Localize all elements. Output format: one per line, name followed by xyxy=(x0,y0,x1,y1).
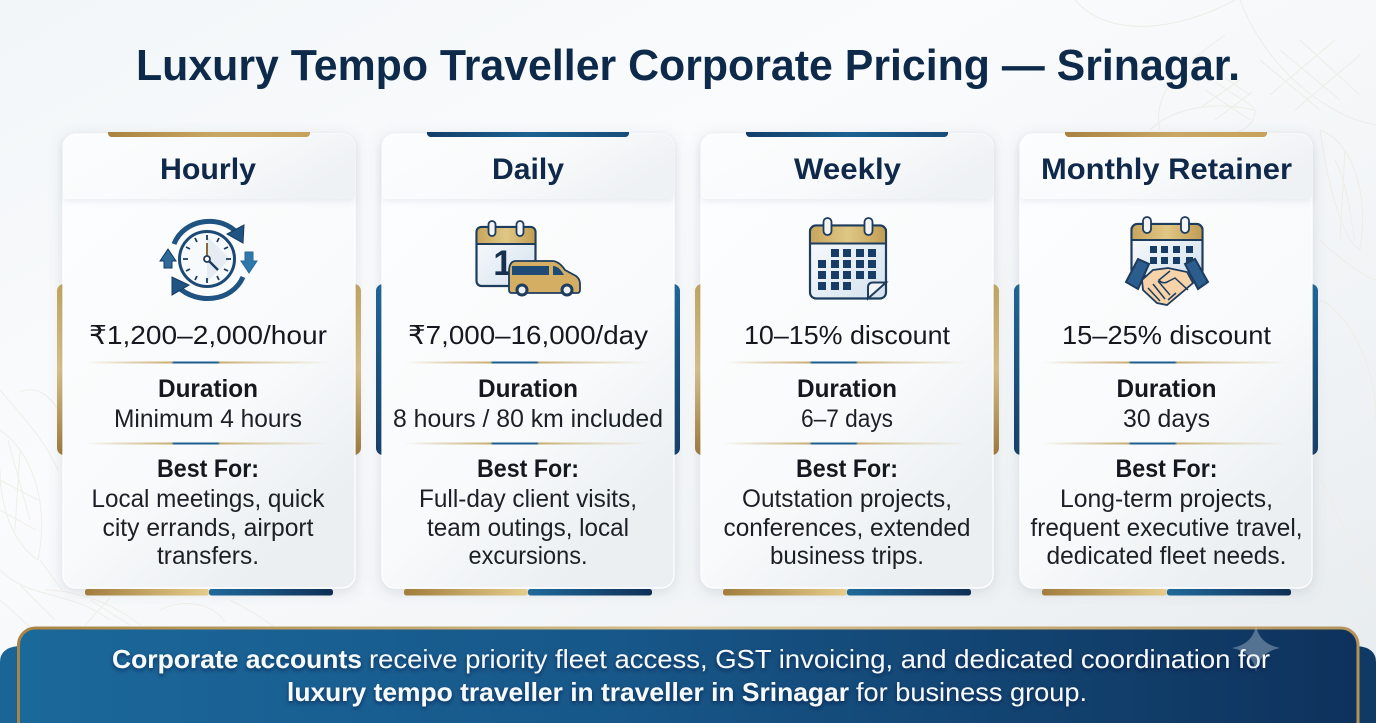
card frame: monthly xyxy=(1014,132,1318,596)
best for: weekly xyxy=(724,455,970,570)
banner text xyxy=(112,644,1270,707)
duration: monthly xyxy=(1116,375,1216,433)
icon: calendar with van xyxy=(476,221,580,295)
duration: daily: Duration xyxy=(478,375,578,403)
duration: daily xyxy=(393,375,663,433)
best for: hourly: transfers. xyxy=(157,542,259,570)
duration: daily: 8 hours / 80 km included xyxy=(393,405,663,433)
best for: weekly: conferences, extended xyxy=(724,514,970,542)
best for: daily xyxy=(419,455,637,570)
best for: monthly: Long-term projects, xyxy=(1060,485,1273,513)
banner text: for business group. xyxy=(856,677,1087,707)
heading: Daily: Daily xyxy=(492,153,564,186)
icon: clock with circular arrows xyxy=(160,221,257,298)
heading: Hourly: Hourly xyxy=(160,153,256,186)
best for: hourly: Local meetings, quick xyxy=(92,485,325,513)
bottom banner xyxy=(0,625,1376,723)
heading: Monthly Retainer: Monthly Retainer xyxy=(1041,153,1292,186)
icon: calendar with handshake xyxy=(1126,217,1208,305)
best for: monthly: dedicated fleet needs. xyxy=(1046,542,1286,570)
banner text: Corporate accounts xyxy=(112,644,362,674)
best for: daily: team outings, local xyxy=(427,514,629,542)
duration: monthly: 30 days xyxy=(1123,405,1210,433)
best for: hourly: city errands, airport xyxy=(102,514,314,542)
best for: daily: Full-day client visits, xyxy=(419,485,637,513)
best for: daily: Best For: xyxy=(477,455,579,483)
best for: hourly: Best For: xyxy=(157,455,259,483)
best for: weekly: business trips. xyxy=(770,542,924,570)
panel: Weekly xyxy=(695,132,999,596)
banner text: luxury tempo traveller in traveller in Srinagar xyxy=(287,677,849,707)
icon: sparkle star xyxy=(1232,625,1280,672)
duration: weekly: Duration xyxy=(797,375,897,403)
card frame: hourly xyxy=(57,132,361,596)
panel: Daily xyxy=(376,132,680,596)
heading: Weekly: Weekly xyxy=(794,153,901,186)
card frame: daily xyxy=(376,132,680,596)
decorative mandala pattern: bottom left xyxy=(0,390,275,627)
icon: weekly calendar xyxy=(810,218,886,298)
duration: monthly: Duration xyxy=(1116,375,1216,403)
banner back tabs xyxy=(0,646,1376,723)
icon: calendar with van: 1 xyxy=(493,244,513,283)
title: Luxury Tempo Traveller Corporate Pricing — Srinagar. xyxy=(136,41,1240,90)
duration: hourly xyxy=(114,375,302,433)
price: hourly: ₹1,200–2,000/hour xyxy=(89,320,327,350)
duration: hourly: Minimum 4 hours xyxy=(114,405,302,433)
price: monthly: 15–25% discount xyxy=(1062,320,1272,350)
duration: hourly: Duration xyxy=(158,375,258,403)
price: weekly: 10–15% discount xyxy=(744,320,951,350)
decorative mandala pattern: top right xyxy=(1075,0,1376,590)
panel: Hourly xyxy=(57,132,361,596)
best for: daily: excursions. xyxy=(468,542,588,570)
banner panel xyxy=(18,628,1358,723)
price: daily: ₹7,000–16,000/day xyxy=(408,320,648,350)
best for: monthly: frequent executive travel, xyxy=(1030,514,1302,542)
banner text: receive priority fleet access, GST invoicing, and dedicated coordination for xyxy=(369,644,1270,674)
duration: weekly xyxy=(797,375,897,433)
panel: Monthly Retainer xyxy=(1014,132,1318,596)
best for: weekly: Best For: xyxy=(796,455,898,483)
best for: hourly xyxy=(92,455,325,570)
card frame: weekly xyxy=(695,132,999,596)
duration: weekly: 6–7 days xyxy=(801,405,893,433)
best for: monthly xyxy=(1030,455,1302,570)
best for: monthly: Best For: xyxy=(1116,455,1218,483)
best for: weekly: Outstation projects, xyxy=(742,485,952,513)
